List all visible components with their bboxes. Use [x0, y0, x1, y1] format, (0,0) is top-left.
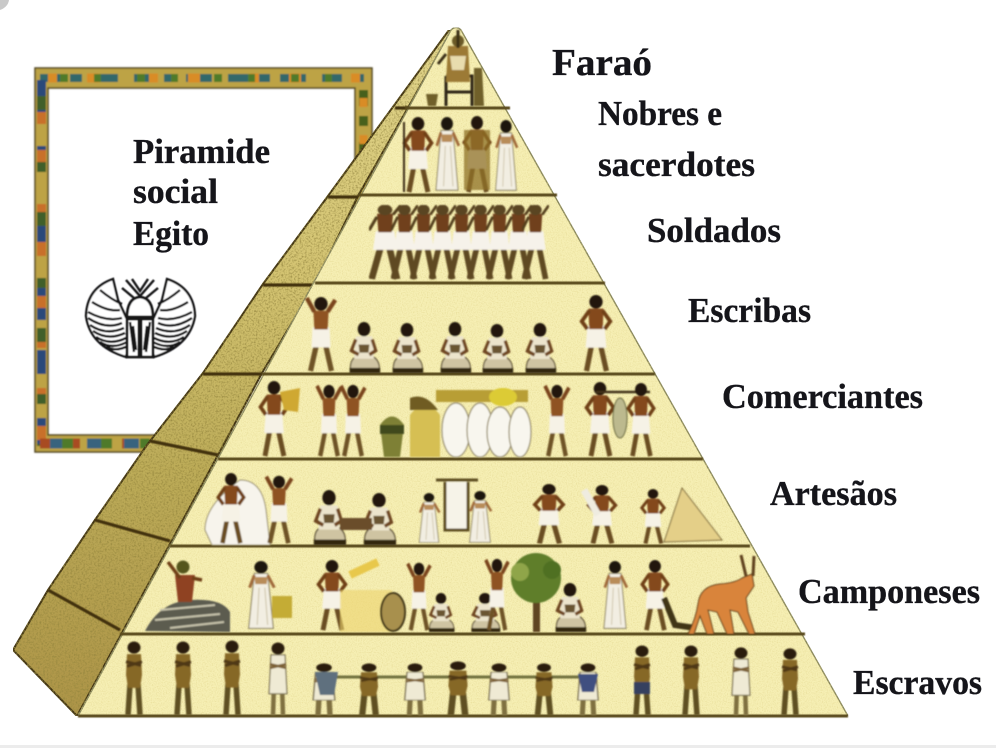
panel: pyramid left side face: [13, 30, 452, 716]
tier 5: merchants: [260, 381, 654, 457]
tier 6: artisans: [205, 473, 722, 545]
label: Artesãos: Artesãos: [770, 475, 897, 513]
panel: decorated frame: [35, 68, 372, 452]
heading: Piramide social Egito: social: [133, 173, 218, 211]
label: Nobres e sacerdotes: Nobres e: [598, 95, 722, 133]
tier lines: [78, 108, 848, 716]
icon: winged scarab: [86, 279, 195, 357]
heading: Piramide social Egito: Egito: [133, 215, 209, 253]
heading: Piramide social Egito: [133, 133, 270, 253]
label: Comerciantes: Comerciantes: [722, 378, 923, 416]
icon: ox and plough: [688, 555, 755, 634]
corner smudge: [0, 0, 9, 10]
heading: Piramide social Egito: Piramide: [133, 133, 270, 171]
label: Soldados: Soldados: [647, 212, 781, 250]
bottom grey strip: [0, 745, 996, 748]
label: Escravos: Escravos: [853, 664, 982, 702]
tier 2: nobles and priests: [404, 116, 517, 192]
label: Camponeses: Camponeses: [798, 573, 980, 611]
label: Escribas: Escribas: [688, 292, 811, 330]
tier 8: slaves: [126, 640, 798, 715]
tier 1: pharaoh: [426, 30, 484, 106]
tier 4: scribes: [307, 295, 610, 373]
label: Nobres e sacerdotes: [598, 95, 755, 184]
panel: pyramid front face: [78, 28, 848, 716]
tier 7: peasants: [145, 553, 695, 632]
tier 3: soldiers: [369, 205, 549, 279]
label: Nobres e sacerdotes: sacerdotes: [598, 146, 755, 184]
label: Faraó: Faraó: [552, 42, 652, 84]
